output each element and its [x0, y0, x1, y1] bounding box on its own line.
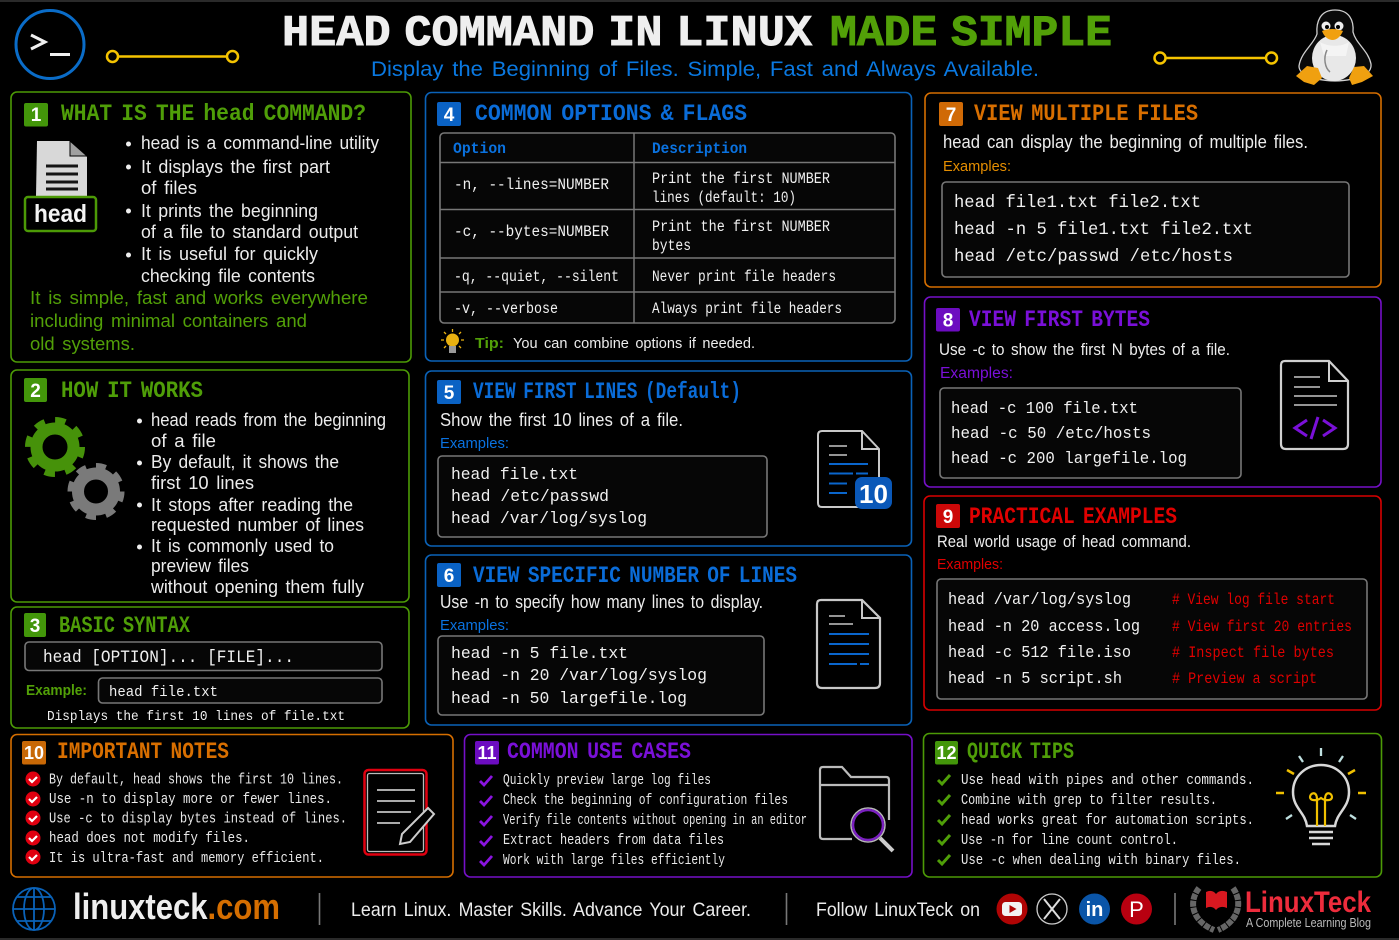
examples label 8: Examples:	[940, 365, 1013, 382]
heading 2: HOW IT WORKS	[61, 378, 203, 404]
tips list: head works great for automation scripts.	[961, 812, 1254, 829]
panel 1: what is the head command	[11, 92, 411, 362]
panel 11: common use cases	[464, 734, 912, 877]
use cases list: Verify file contents without opening in an editor	[503, 812, 807, 829]
icon: light bulb	[1276, 748, 1366, 844]
bullet list 2: without opening them fully	[150, 577, 364, 597]
code box 8: head -c 200 largefile.log	[951, 449, 1187, 468]
options table: bytes	[652, 237, 691, 255]
icon: document with lines	[817, 600, 880, 688]
badge 6	[437, 563, 461, 587]
icon: Pinterest: P	[1129, 897, 1144, 922]
panel 12: quick tips	[924, 734, 1382, 877]
heading 1: WHAT IS THE head COMMAND?	[61, 101, 366, 127]
code box 5: head /etc/passwd	[451, 488, 609, 507]
green summary text: It is simple, fast and works everywhere	[30, 287, 368, 308]
badge 10: 10	[24, 743, 44, 763]
badge 7	[939, 102, 963, 126]
green checks	[938, 775, 950, 864]
examples label 5: Examples:	[440, 435, 509, 452]
code box 9: # Inspect file bytes	[1172, 644, 1334, 662]
connector: right	[1154, 52, 1277, 64]
badge 1: 1	[31, 105, 42, 126]
heading 6: VIEW SPECIFIC NUMBER OF LINES	[473, 563, 797, 589]
code box 7	[942, 182, 1349, 277]
subtitle: Display the Beginning of Files. Simple, Fast and Always Available.	[371, 58, 1039, 81]
icon: Linux penguin	[1296, 10, 1373, 85]
tips list	[961, 772, 1254, 869]
icon: YouTube	[996, 894, 1028, 924]
notes list: Use -n to display more or fewer lines.	[49, 791, 332, 808]
notes list: Use -c to display bytes instead of lines.	[49, 810, 347, 828]
badge 8: 8	[943, 310, 953, 332]
description 8: Use -c to show the first N bytes of a file.	[939, 341, 1230, 359]
options table: -n, --lines=NUMBER	[454, 176, 609, 194]
badge 5	[437, 380, 461, 404]
options table: Print the first NUMBER	[652, 170, 830, 188]
follow label: Follow LinuxTeck on	[816, 899, 980, 921]
icon: head document	[25, 141, 96, 231]
notes list: head does not modify files.	[49, 830, 250, 847]
code box 5: head /var/log/syslog	[451, 510, 647, 529]
logo text: LinuxTeck	[1245, 886, 1371, 919]
badge 1	[24, 103, 48, 126]
code box 7: head file1.txt file2.txt	[954, 193, 1201, 213]
logo tagline: A Complete Learning Blog	[1246, 916, 1371, 930]
panel 8: view first bytes	[924, 297, 1381, 487]
tip text: You can combine options if needed.	[513, 335, 755, 352]
bullet list 1: head is a command-line utility	[141, 133, 379, 153]
icon: LinkedIn	[1079, 894, 1110, 924]
code box 9: head -c 512 file.iso	[948, 643, 1131, 662]
code box 6	[438, 636, 764, 715]
options table: -q, --quiet, --silent	[454, 268, 619, 286]
example label: Example:	[26, 682, 87, 699]
notes list: By default, head shows the first 10 lines.	[49, 772, 343, 788]
code box 8: head -c 100 file.txt	[951, 399, 1138, 418]
options table: -c, --bytes=NUMBER	[454, 223, 609, 241]
notes list: It is ultra-fast and memory efficient.	[49, 850, 324, 867]
bullet list 1: It displays the first part	[141, 157, 330, 177]
bullet list 2: preview files	[151, 556, 249, 576]
icon: notes and pencil	[364, 770, 434, 854]
icon: tip bulb	[441, 329, 464, 353]
options table: Always print file headers	[652, 300, 842, 318]
icon: document with 10	[818, 431, 892, 509]
description 9: Real world usage of head command.	[937, 533, 1191, 551]
icon: X	[1037, 894, 1067, 924]
badge 6: 6	[444, 566, 454, 587]
syntax box	[25, 642, 382, 670]
bullet list 2	[137, 410, 386, 597]
bullet list 2: requested number of lines	[151, 515, 364, 535]
heading 3: BASIC SYNTAX	[59, 613, 190, 639]
logo: wreath and book	[1193, 888, 1238, 930]
code box 6: head -n 5 file.txt	[451, 645, 628, 664]
badge 9	[936, 504, 960, 528]
description 7: head can display the beginning of multiple files.	[943, 132, 1308, 152]
code box 9: head -n 20 access.log	[948, 617, 1140, 636]
connector: left	[107, 51, 238, 62]
badge 3: 3	[30, 616, 40, 637]
icon: folder and magnifier	[820, 767, 893, 851]
green summary text: old systems.	[30, 333, 135, 354]
code box 6: head -n 20 /var/log/syslog	[451, 667, 707, 686]
icon: globe	[13, 888, 55, 930]
use cases list: Check the beginning of configuration files	[503, 792, 788, 809]
heading 4: COMMON OPTIONS & FLAGS	[475, 101, 747, 127]
title	[282, 9, 1112, 59]
panel 10: important notes	[11, 734, 453, 877]
bullet list 2: first 10 lines	[151, 473, 254, 493]
icon: gears	[28, 420, 121, 516]
title: HEAD COMMAND IN LINUX	[282, 9, 813, 59]
footer	[13, 886, 1371, 930]
icon: code document	[1281, 361, 1348, 449]
use cases list: Quickly preview large log files	[503, 772, 711, 789]
code box 8	[940, 388, 1241, 478]
icon: document with 10: 10	[859, 479, 888, 509]
panel 6: view specific number of lines	[426, 555, 912, 725]
syntax note: Displays the first 10 lines of file.txt	[47, 709, 345, 725]
purple checks	[480, 776, 492, 865]
title: MADE SIMPLE	[830, 9, 1112, 59]
badge 2	[24, 378, 47, 402]
heading 11: COMMON USE CASES	[507, 739, 691, 765]
use cases list	[503, 772, 807, 869]
options table: Never print file headers	[652, 268, 836, 286]
heading 8: VIEW FIRST BYTES	[969, 307, 1150, 333]
bullet list 1: of files	[141, 178, 197, 198]
bullet list 1	[126, 133, 379, 286]
badge 12: 12	[936, 743, 957, 763]
notes list	[49, 772, 347, 867]
green summary text: including minimal containers and	[30, 310, 307, 331]
heading 10: IMPORTANT NOTES	[57, 739, 229, 765]
code box 9: # View log file start	[1172, 591, 1335, 609]
site name: linuxteck.com	[73, 886, 280, 927]
tips list: Use -c when dealing with binary files.	[961, 852, 1241, 869]
green summary text	[30, 287, 368, 354]
badge 2: 2	[30, 381, 41, 402]
red check icons	[26, 772, 40, 864]
panel 9: practical examples	[924, 496, 1381, 710]
badge 11: 11	[477, 743, 497, 763]
description 5: Show the first 10 lines of a file.	[440, 410, 683, 430]
code box 6: head -n 50 largefile.log	[451, 690, 687, 709]
badge 3	[24, 613, 46, 637]
code box 7: head /etc/passwd /etc/hosts	[954, 247, 1233, 267]
examples label 9: Examples:	[937, 556, 1003, 573]
heading 9: PRACTICAL EXAMPLES	[969, 504, 1177, 530]
panel 2: how it works	[11, 370, 409, 602]
tips list: Use head with pipes and other commands.	[961, 772, 1254, 789]
code box 5: head file.txt	[451, 466, 578, 485]
code box 9	[937, 579, 1367, 699]
examples label 6: Examples:	[440, 617, 509, 634]
bullet list 2: It stops after reading the	[151, 495, 353, 515]
options table: lines (default: 10)	[652, 189, 796, 207]
bullet list 2: By default, it shows the	[151, 452, 339, 472]
use cases list: Work with large files efficiently	[503, 852, 725, 869]
bullet list 1: It is useful for quickly	[141, 244, 318, 264]
panel 4: common options and flags	[426, 92, 912, 361]
tip text: Tip:	[475, 335, 504, 352]
bullet list 1: It prints the beginning	[141, 201, 318, 221]
tips list: Use -n for line count control.	[961, 832, 1178, 849]
bullet list 2: head reads from the beginning	[151, 410, 386, 430]
panel 3: basic syntax	[11, 607, 409, 728]
heading 5: VIEW FIRST LINES (Default)	[473, 379, 741, 405]
heading 7: VIEW MULTIPLE FILES	[974, 101, 1198, 127]
code box 5	[438, 456, 767, 537]
options table: Description	[652, 140, 747, 158]
options table: Print the first NUMBER	[652, 218, 830, 236]
icon: terminal prompt	[16, 10, 84, 78]
examples label 7: Examples:	[943, 158, 1011, 175]
icon: Pinterest	[1121, 894, 1152, 924]
tips list: Combine with grep to filter results.	[961, 792, 1217, 809]
bullet list 2: of a file	[151, 431, 216, 451]
description 6: Use -n to specify how many lines to display.	[440, 592, 763, 612]
code box 9: head -n 5 script.sh	[948, 669, 1122, 688]
badge 8	[936, 308, 960, 332]
code box 9: # Preview a script	[1172, 670, 1317, 688]
panel 7: view multiple files	[925, 93, 1381, 287]
example box	[98, 678, 382, 703]
use cases list: Extract headers from data files	[503, 832, 724, 849]
code box 8: head -c 50 /etc/hosts	[951, 424, 1151, 443]
badge 9: 9	[943, 507, 953, 528]
badge 11	[475, 741, 499, 764]
icon: head document: head	[34, 200, 87, 228]
badge 4: 4	[444, 105, 455, 126]
bullet list 1: of a file to standard output	[141, 222, 358, 242]
options table	[440, 133, 895, 323]
badge 4	[437, 102, 461, 126]
options table: -v, --verbose	[454, 300, 558, 318]
panel 5: view first lines	[426, 371, 912, 546]
options table: Option	[453, 140, 506, 158]
badge 5: 5	[444, 383, 455, 404]
badge 7: 7	[946, 105, 956, 126]
example box: head file.txt	[109, 684, 218, 701]
code box 7: head -n 5 file1.txt file2.txt	[954, 220, 1253, 240]
bullet list 1: checking file contents	[141, 266, 315, 286]
syntax box: head [OPTION]... [FILE]...	[43, 648, 294, 668]
code box 9: # View first 20 entries	[1172, 618, 1352, 636]
bullet list 2: It is commonly used to	[151, 536, 334, 556]
icon: LinkedIn: in	[1086, 899, 1103, 921]
code box 9: head /var/log/syslog	[948, 590, 1131, 609]
heading 12: QUICK TIPS	[967, 739, 1074, 765]
tagline: Learn Linux. Master Skills. Advance Your Career.	[351, 899, 751, 921]
